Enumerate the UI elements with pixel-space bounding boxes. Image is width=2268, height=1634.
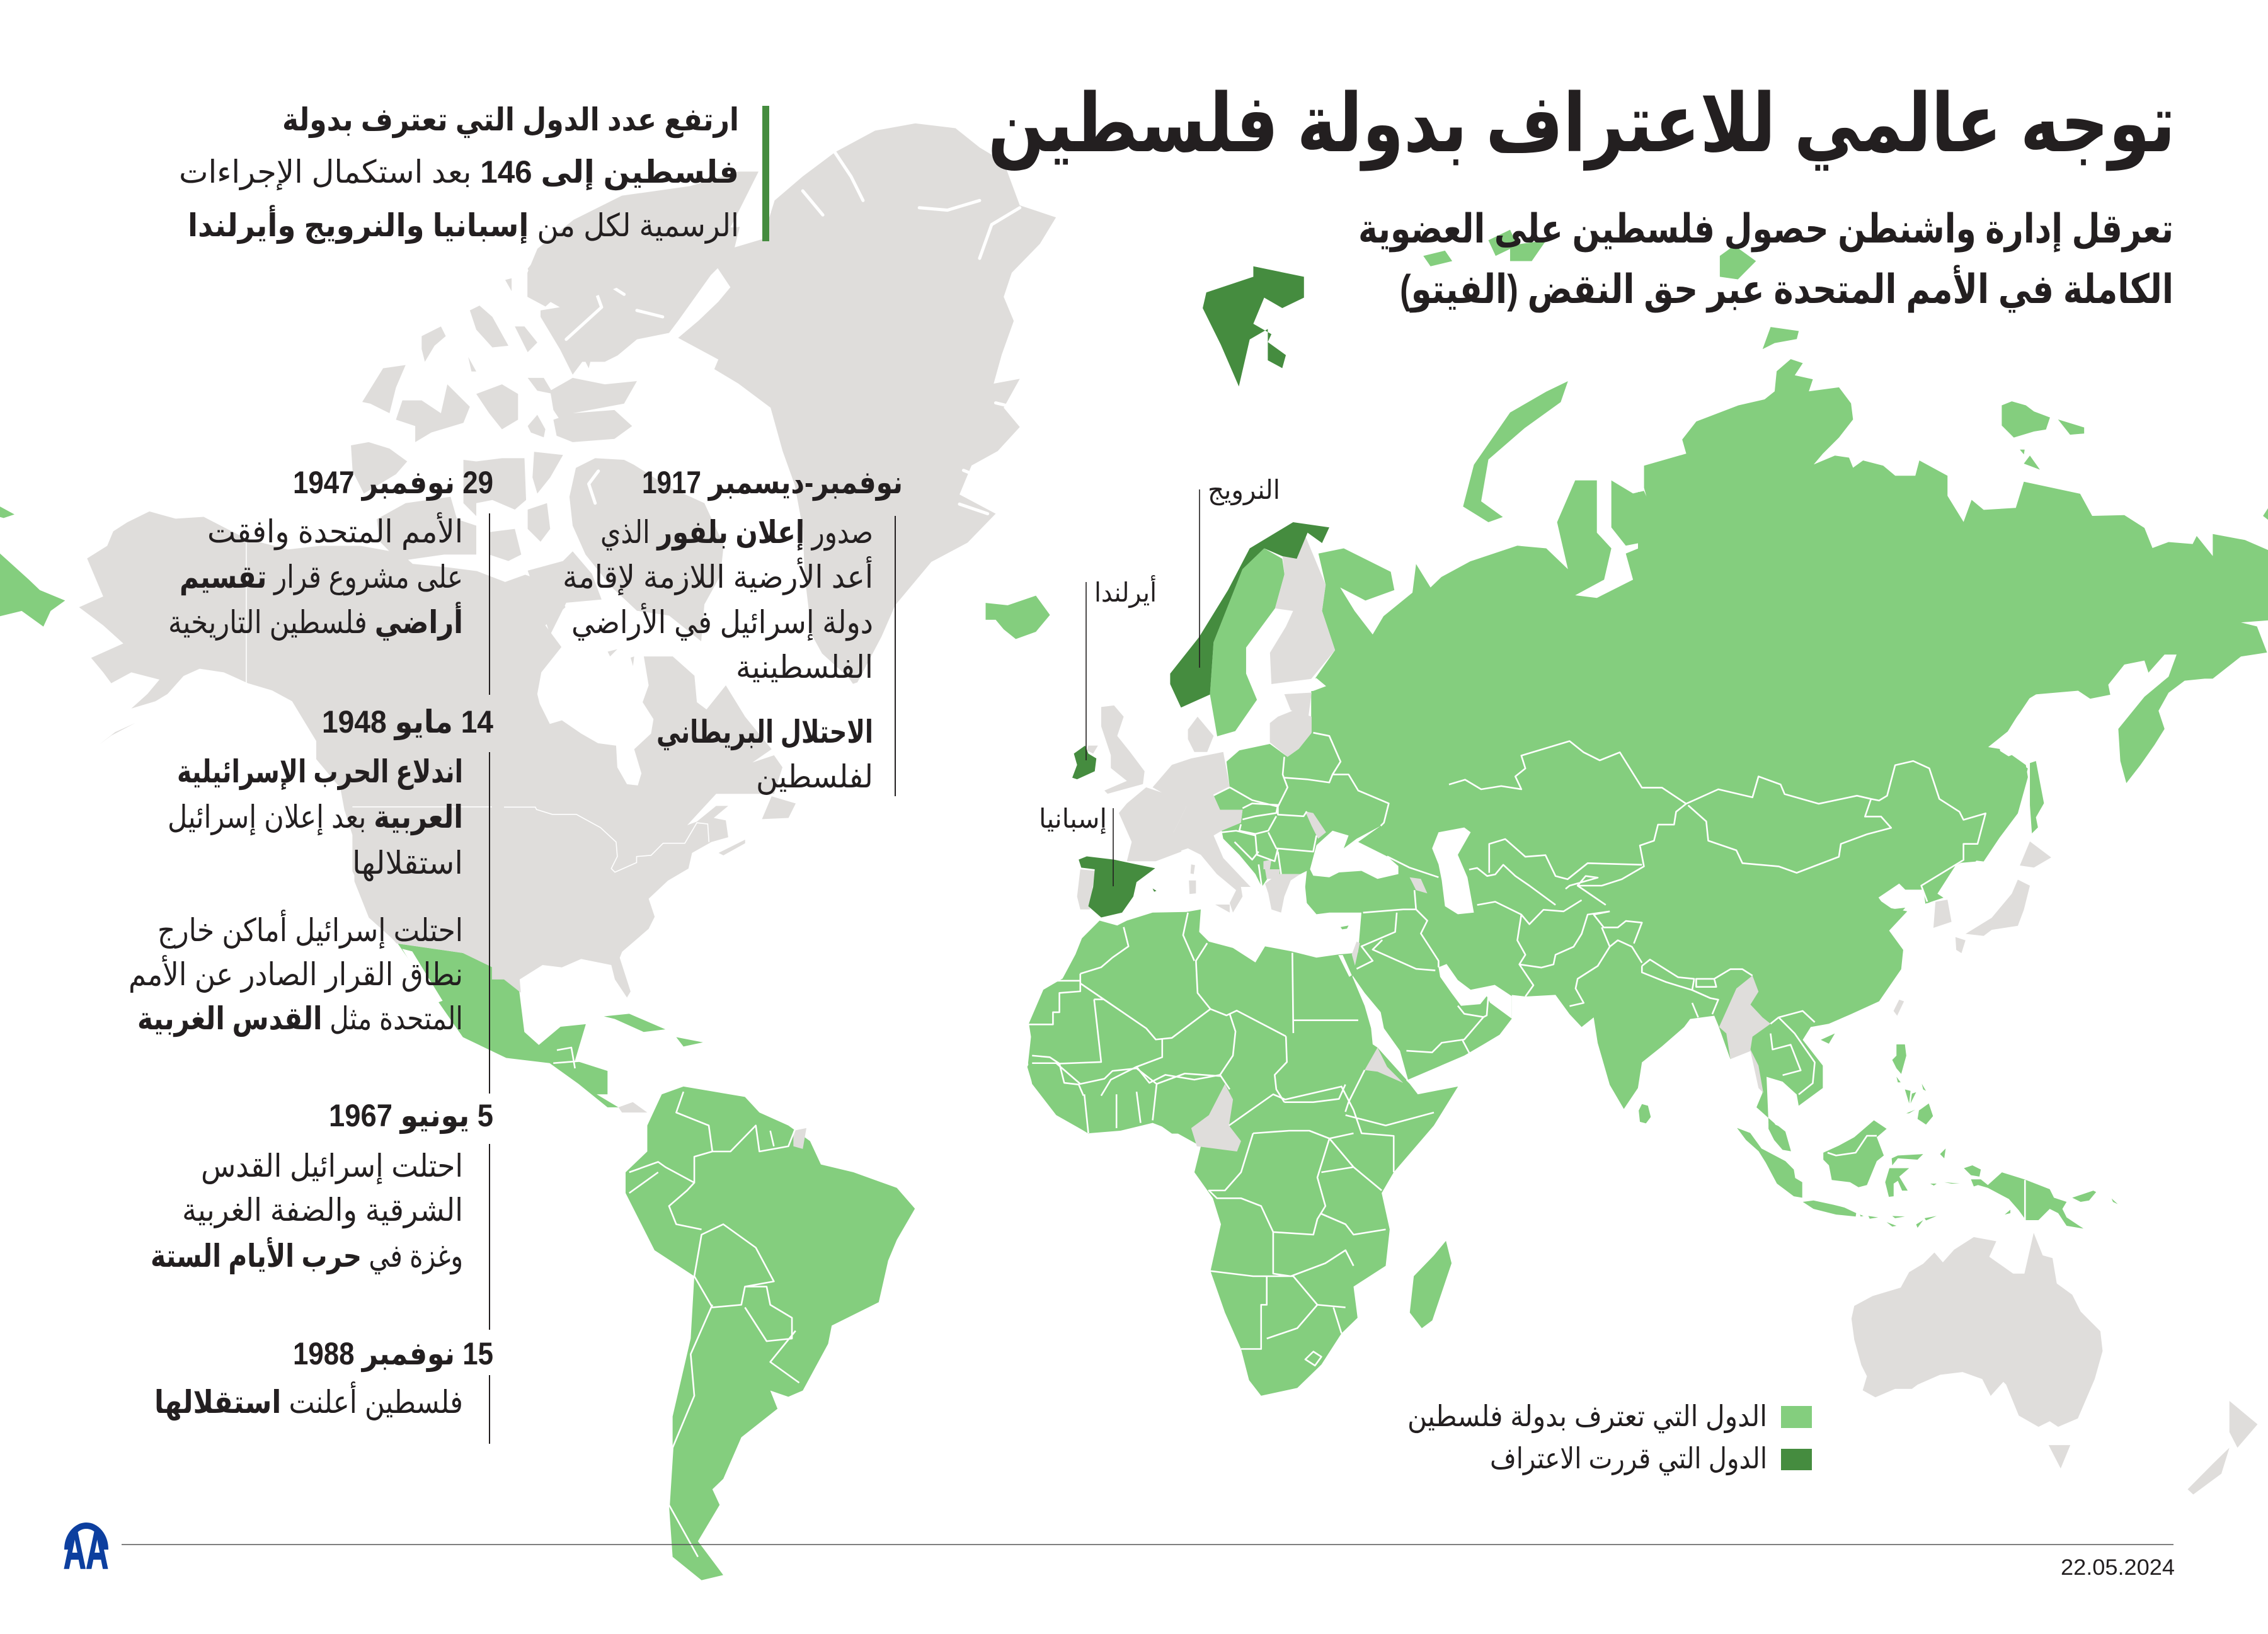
label: Spain: [1039, 804, 1113, 886]
intro callout: [179, 102, 769, 244]
timeline: 1947: [168, 465, 493, 695]
timeline: 1948: [129, 704, 493, 1094]
timeline: 1948: نطاق القرار الصادر عن الأمم: [129, 955, 463, 993]
land: Africa south, New Zealand, Tasmania: [1028, 1017, 2257, 1494]
land: South and Central America: [355, 767, 915, 1580]
timeline: 1947: الأمم المتحدة وافقت: [207, 512, 463, 551]
subtitle: [1358, 206, 2174, 313]
logo: AA: AA: [64, 1521, 108, 1580]
intro callout: ارتفع عدد الدول التي تعترف بدولة: [282, 102, 739, 139]
countries newly recognising: Norway, Svalbard, Ireland, Spain: [1072, 266, 1329, 917]
timeline: 1917: أعد الأرضية اللازمة لإقامة: [563, 556, 873, 595]
Ireland and Spain: [1072, 746, 1157, 917]
label: Ireland: أيرلندا: [1094, 575, 1157, 608]
timeline: 1967: وغزة في حرب الأيام الستة: [151, 1237, 463, 1275]
timeline: 1917: الفلسطينية: [736, 649, 873, 685]
timeline: 1917: نوفمبر-ديسمبر 1917: [642, 465, 903, 501]
land: Indonesia, Philippines, Australia: [1737, 1044, 2118, 1427]
land: Greenland: [527, 123, 1056, 684]
country borders: Africa south: [1032, 1063, 1434, 1366]
land: USA south-west: [355, 767, 521, 991]
timeline: 1948: احتلت إسرائيل أماكن خارج: [158, 910, 463, 949]
timeline: 1988: [154, 1336, 493, 1444]
label: Spain: إسبانيا: [1039, 804, 1107, 835]
land: Asia mainland: [1449, 690, 2044, 1151]
timeline: 1948: العربية بعد إعلان إسرائيل: [168, 799, 463, 836]
intro callout: الرسمية لكل من إسبانيا والنرويج وأيرلندا: [188, 205, 739, 244]
country borders: Europe, Middle East, North Africa: [1213, 733, 1488, 1056]
land: Canadian Arctic archipelago: [351, 227, 740, 641]
timeline: 1917: دولة إسرائيل في الأراضي: [571, 603, 873, 641]
footer rule: [122, 1544, 2174, 1545]
seas: [1310, 826, 1399, 879]
logo: AA: [64, 1521, 108, 1580]
land: Myanmar: [1719, 976, 1770, 1093]
legend: الدول التي قررت الاعتراف: [1490, 1442, 1767, 1476]
land: Chukotka: [0, 506, 65, 627]
Norway and Svalbard: [1170, 266, 1329, 707]
timeline: 1917: الاحتلال البريطاني: [656, 714, 873, 751]
country borders: South America: [553, 1048, 799, 1557]
timeline: 1967: 5 يونيو 1967: [329, 1098, 493, 1134]
land: Russia east, Far East islands, Japan: [1638, 327, 2268, 945]
land: Eastern Canada and USA: [492, 649, 796, 998]
land: Iceland: [985, 596, 1050, 639]
timeline: 1917: لفلسطين: [756, 759, 873, 795]
timeline: 1967: احتلت إسرائيل القدس: [201, 1148, 463, 1185]
legend: [1407, 1400, 1812, 1476]
country borders: Asia: [1449, 741, 1986, 1095]
land: Western Europe: [1029, 678, 1512, 1112]
timeline: 1948: اندلاع الحرب الإسرائيلية: [177, 754, 463, 791]
date: 22.05.2024: [2061, 1555, 2175, 1580]
timeline: 1947: 29 نوفمبر 1947: [293, 465, 493, 501]
timeline: 1967: الشرقية والضفة الغربية: [182, 1192, 463, 1229]
timeline: 1988: فلسطين أعلنت استقلالها: [154, 1381, 463, 1421]
legend: الدول التي تعترف بدولة فلسطين: [1407, 1400, 1767, 1434]
timeline: 1917: صدور إعلان بلفور الذي: [600, 515, 873, 551]
timeline: 1947: على مشروع قرار تقسيم: [180, 559, 463, 596]
timeline: 1988: 15 نوفمبر 1988: [293, 1336, 493, 1373]
timeline: 1948: المتحدة مثل القدس الغربية: [137, 1001, 463, 1037]
label: Norway: النرويج: [1208, 475, 1280, 506]
timeline: 1948: 14 مايو 1948: [322, 704, 493, 741]
land: Eastern Europe, Turkey, Middle East, North Africa: [1028, 726, 1512, 1134]
land: Alaska and Canada west: [79, 511, 565, 951]
timeline: 1947: أراضي فلسطين التاريخية: [168, 602, 463, 641]
intro callout: فلسطين إلى 146 بعد استكمال الإجراءات: [179, 154, 739, 191]
timeline: 1917: [563, 465, 903, 796]
land: Russia west, Scandinavia: [1210, 230, 1756, 819]
timeline: 1967: [151, 1098, 493, 1330]
timeline: 1948: استقلالها: [352, 845, 463, 882]
